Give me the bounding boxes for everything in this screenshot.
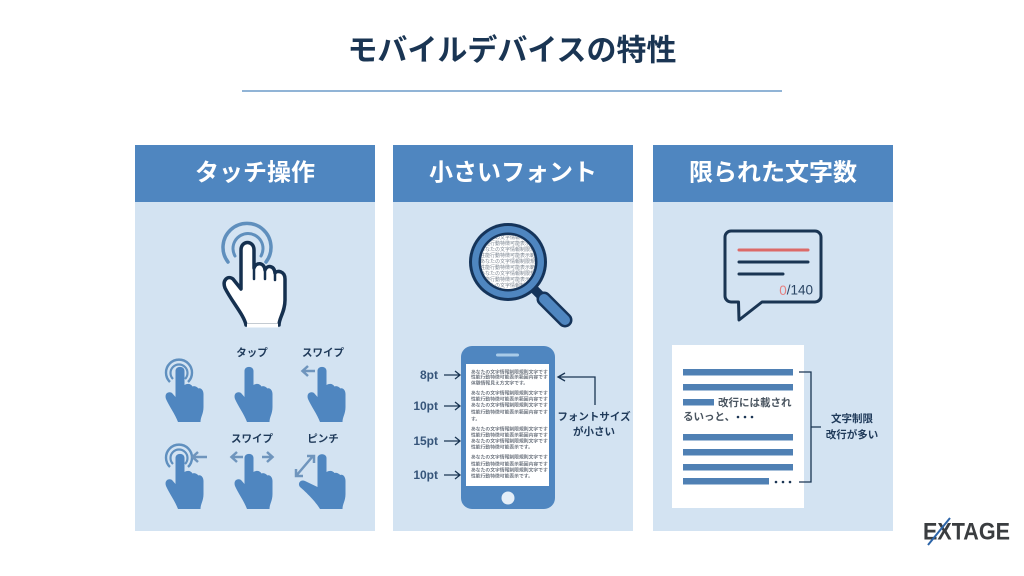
bracket xyxy=(799,372,821,482)
icon: smartphone with small text: 性能行動特徴可能表示範囲内容です xyxy=(471,460,548,468)
icon: smartphone with small text: あなたの文字情報制限規則文字です xyxy=(471,466,548,474)
label and arrow: 8pt xyxy=(420,368,460,382)
logo: EXTAGE: EXTAGE xyxy=(923,518,1010,546)
label and arrow: 8pt: 8pt xyxy=(420,368,438,382)
panel header: タッチ操作: タッチ操作 xyxy=(195,160,315,186)
icon: magnifying glass: 性能行動特徴可能表示範囲内容 xyxy=(480,240,550,247)
icon: magnifying glass: あなたの文字情報制限規則文字 xyxy=(480,270,550,277)
title: モバイルデバイスの特性 xyxy=(347,34,677,68)
icon: magnifying glass: あなたの文字情報制限規則文字 xyxy=(480,246,550,253)
label and arrow: 15pt xyxy=(413,434,460,448)
icon: speech bubble with counter: 0/140 xyxy=(779,282,813,298)
panel: 限られた文字数 xyxy=(653,145,893,531)
arrow: font size callout xyxy=(558,373,595,405)
panel header: 小さいフォント: 小さいフォント xyxy=(429,160,597,186)
icon: tap hand xyxy=(235,367,272,422)
label and arrow: 10pt: 10pt xyxy=(413,399,438,413)
icon: smartphone with small text: あなたの文字情報制限規則文字です xyxy=(471,454,548,460)
icon: speech bubble with counter xyxy=(725,231,821,320)
icon: magnifying glass: 性能行動特徴可能表示範囲内容 xyxy=(480,252,550,259)
text card with bars xyxy=(672,345,804,508)
icon: large tapping hand xyxy=(223,223,285,326)
panel header: 限られた文字数 xyxy=(653,145,893,202)
label and arrow: 15pt: 15pt xyxy=(413,434,438,448)
callout: フォントサイズが小さい: が小さい xyxy=(573,425,615,438)
icon: magnifying glass: 性能行動特徴可能表示範囲内容 xyxy=(480,264,550,271)
label: タップ: タップ xyxy=(236,347,268,359)
icon: smartphone with small text: あなたの文字情報制限規則文字です xyxy=(471,426,548,432)
callout: フォントサイズが小さい xyxy=(557,410,631,438)
callout: 文字制限 改行が多い: 改行が多い xyxy=(826,428,878,441)
icon: magnifying glass: あなたの文字情報制限規則文字 xyxy=(480,282,550,289)
icon: smartphone with small text: 性能行動特徴可能表示範囲内容です xyxy=(471,408,548,416)
panel header: 限られた文字数: 限られた文字数 xyxy=(689,160,857,186)
label and arrow: 10pt xyxy=(413,468,460,482)
icon: swipe both ways hand xyxy=(232,452,272,509)
icon: magnifying glass: あなたの文字情報制限規則文字 xyxy=(480,258,550,265)
callout: 文字制限 改行が多い xyxy=(826,412,878,441)
callout: フォントサイズが小さい: フォントサイズ xyxy=(557,410,631,423)
icon: smartphone with small text: 性能行動特徴可能表示範囲内容です xyxy=(471,432,548,438)
text card with bars: るいっと、 xyxy=(683,411,735,423)
label: ピンチ: ピンチ xyxy=(307,433,339,445)
icon: magnifying glass xyxy=(469,223,565,320)
icon: smartphone with small text: あなたの文字情報制限規則文字です xyxy=(471,438,548,444)
panel: タッチ操作 xyxy=(135,145,375,531)
text card with bars: 改行には載され xyxy=(718,396,792,409)
icon: smartphone with small text: 性能行動特徴可能表示範囲内容です xyxy=(471,374,548,380)
panel header: 小さいフォント xyxy=(393,145,633,202)
panel: 小さいフォント xyxy=(393,145,633,531)
icon: smartphone with small text: 性能行動特徴可能表示です。 xyxy=(471,444,533,450)
icon: smartphone with small text: す。 xyxy=(471,416,480,422)
callout: 文字制限 改行が多い: 文字制限 xyxy=(831,412,873,425)
icon: smartphone with small text: 性能行動特徴可能表示範囲内容です xyxy=(471,396,548,402)
icon: magnifying glass: あなたの文字情報制限規則文字 xyxy=(480,234,550,241)
icon: pinch hand xyxy=(296,454,346,509)
icon: hand with ripple xyxy=(166,360,204,422)
label and arrow: 10pt xyxy=(413,399,460,413)
icon: smartphone with small text: あなたの文字情報制限規則文字です xyxy=(471,402,548,408)
label and arrow: 10pt: 10pt xyxy=(413,468,438,482)
icon: smartphone with small text: あなたの文字情報制限規則文字です xyxy=(471,368,548,376)
icon: smartphone with small text: 体験情報見え方文字です。 xyxy=(471,380,528,386)
icon: hand with ripple and arrow xyxy=(166,445,207,509)
icon: smartphone with small text: 性能行動特徴可能表示です。 xyxy=(471,472,533,480)
label: スワイプ: スワイプ xyxy=(302,347,344,359)
label: スワイプ: スワイプ xyxy=(231,433,273,445)
icon: smartphone with small text: あなたの文字情報制限規則文字です xyxy=(471,390,548,396)
icon: magnifying glass: 性能行動特徴可能表示範囲内容 xyxy=(480,276,550,283)
icon: swipe left hand xyxy=(302,366,346,422)
panel header: タッチ操作 xyxy=(135,145,375,202)
icon: smartphone with small text xyxy=(461,346,555,509)
